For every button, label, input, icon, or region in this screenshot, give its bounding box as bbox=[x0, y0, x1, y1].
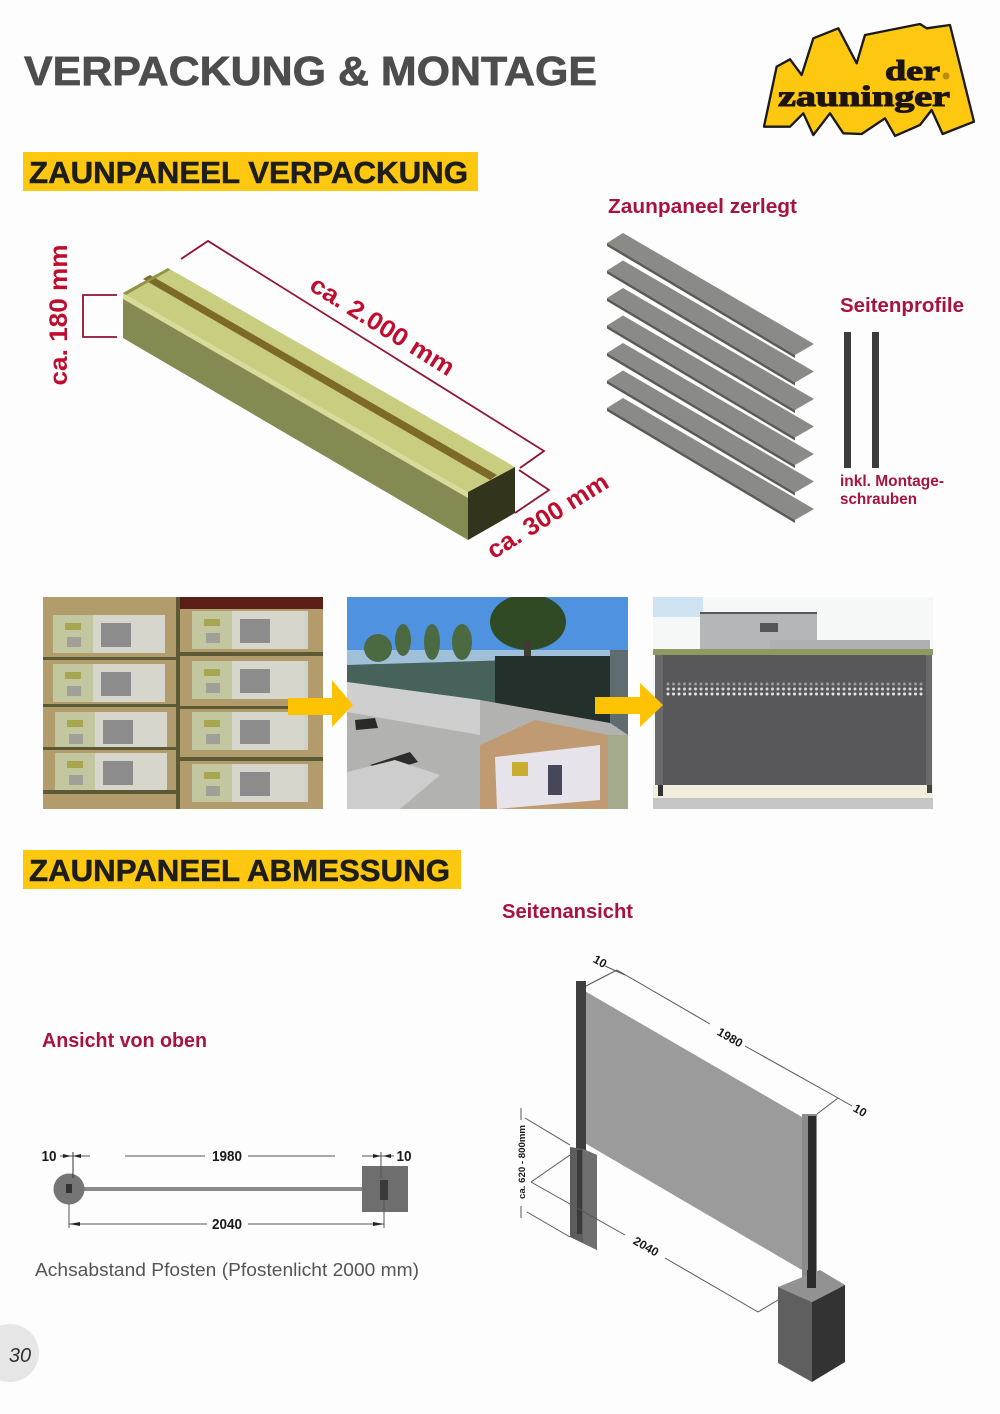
label: Seitenansicht: Seitenansicht bbox=[502, 901, 633, 923]
side view drawing: 2040 bbox=[631, 1234, 661, 1260]
disassembled panel slats bbox=[607, 233, 814, 523]
label: 300 mm: ca. 300 mm bbox=[482, 468, 614, 565]
round post bbox=[54, 1174, 84, 1204]
top view drawing: 10 bbox=[42, 1148, 56, 1165]
sleeve bbox=[570, 1147, 597, 1250]
photo: installed fence bbox=[653, 597, 933, 809]
photo: stacked packages bbox=[43, 597, 323, 809]
label: inkl. Montageschrauben: schrauben bbox=[840, 491, 917, 508]
trees bbox=[364, 624, 472, 662]
page number badge: 30 bbox=[9, 1345, 31, 1367]
side profiles bbox=[844, 332, 879, 468]
dimension lines bbox=[521, 966, 852, 1312]
package drawing with dimensions bbox=[45, 241, 614, 565]
label: Ansicht von oben: Ansicht von oben bbox=[42, 1030, 207, 1052]
arrowheads bbox=[63, 1154, 391, 1226]
carton bbox=[480, 720, 608, 809]
caption: Achsabstand: Achsabstand Pfosten (Pfostenlicht 2000 mm) bbox=[35, 1260, 419, 1280]
photo: package on site bbox=[347, 594, 628, 809]
wrapped package bbox=[347, 682, 628, 809]
arrow bbox=[288, 680, 353, 727]
logo: der zauninger bbox=[764, 24, 974, 136]
top view drawing: 10 bbox=[396, 1148, 412, 1165]
side view drawing bbox=[517, 952, 870, 1382]
logo: der zauninger: zauninger bbox=[778, 80, 950, 113]
bar bbox=[84, 1187, 362, 1191]
concrete block bbox=[778, 1270, 845, 1302]
label: Zaunpaneel zerlegt: Zaunpaneel zerlegt bbox=[608, 196, 797, 218]
side view drawing: 1980 bbox=[715, 1025, 745, 1051]
dimension lines bbox=[60, 1152, 394, 1228]
package box bbox=[123, 268, 515, 540]
right post bbox=[802, 1114, 817, 1286]
side view drawing: 10 bbox=[591, 952, 610, 971]
fences bbox=[347, 660, 495, 703]
label: 180 mm: ca. 180 mm bbox=[45, 244, 73, 386]
label: 2000 mm: ca. 2.000 mm bbox=[305, 271, 460, 382]
dimension lines bbox=[83, 241, 549, 513]
left post bbox=[576, 981, 586, 1151]
label: inkl. Montageschrauben bbox=[840, 473, 944, 508]
top view drawing: 2040 bbox=[212, 1216, 242, 1233]
page number badge bbox=[0, 1324, 39, 1382]
arrow bbox=[595, 683, 663, 727]
perforation band bbox=[668, 684, 924, 694]
title: VERPACKUNG & MONTAGE bbox=[24, 48, 597, 94]
heading: Zaunpaneel Abmessung: ZAUNPANEEL ABMESSUNG bbox=[29, 853, 450, 888]
top view drawing: 1980 bbox=[212, 1148, 242, 1165]
logo: der zauninger: der bbox=[885, 55, 940, 87]
top view drawing bbox=[42, 1148, 412, 1233]
heading: Zaunpaneel Verpackung: ZAUNPANEEL VERPACKUNG bbox=[29, 155, 468, 190]
fence panel bbox=[583, 990, 802, 1270]
label: inkl. Montageschrauben: inkl. Montage- bbox=[840, 473, 944, 490]
side view drawing: ca. 620 - 800mm bbox=[517, 1125, 527, 1199]
label: Seitenprofile: Seitenprofile bbox=[840, 295, 964, 317]
side view drawing: 10 bbox=[851, 1101, 870, 1120]
square post bbox=[362, 1166, 408, 1212]
